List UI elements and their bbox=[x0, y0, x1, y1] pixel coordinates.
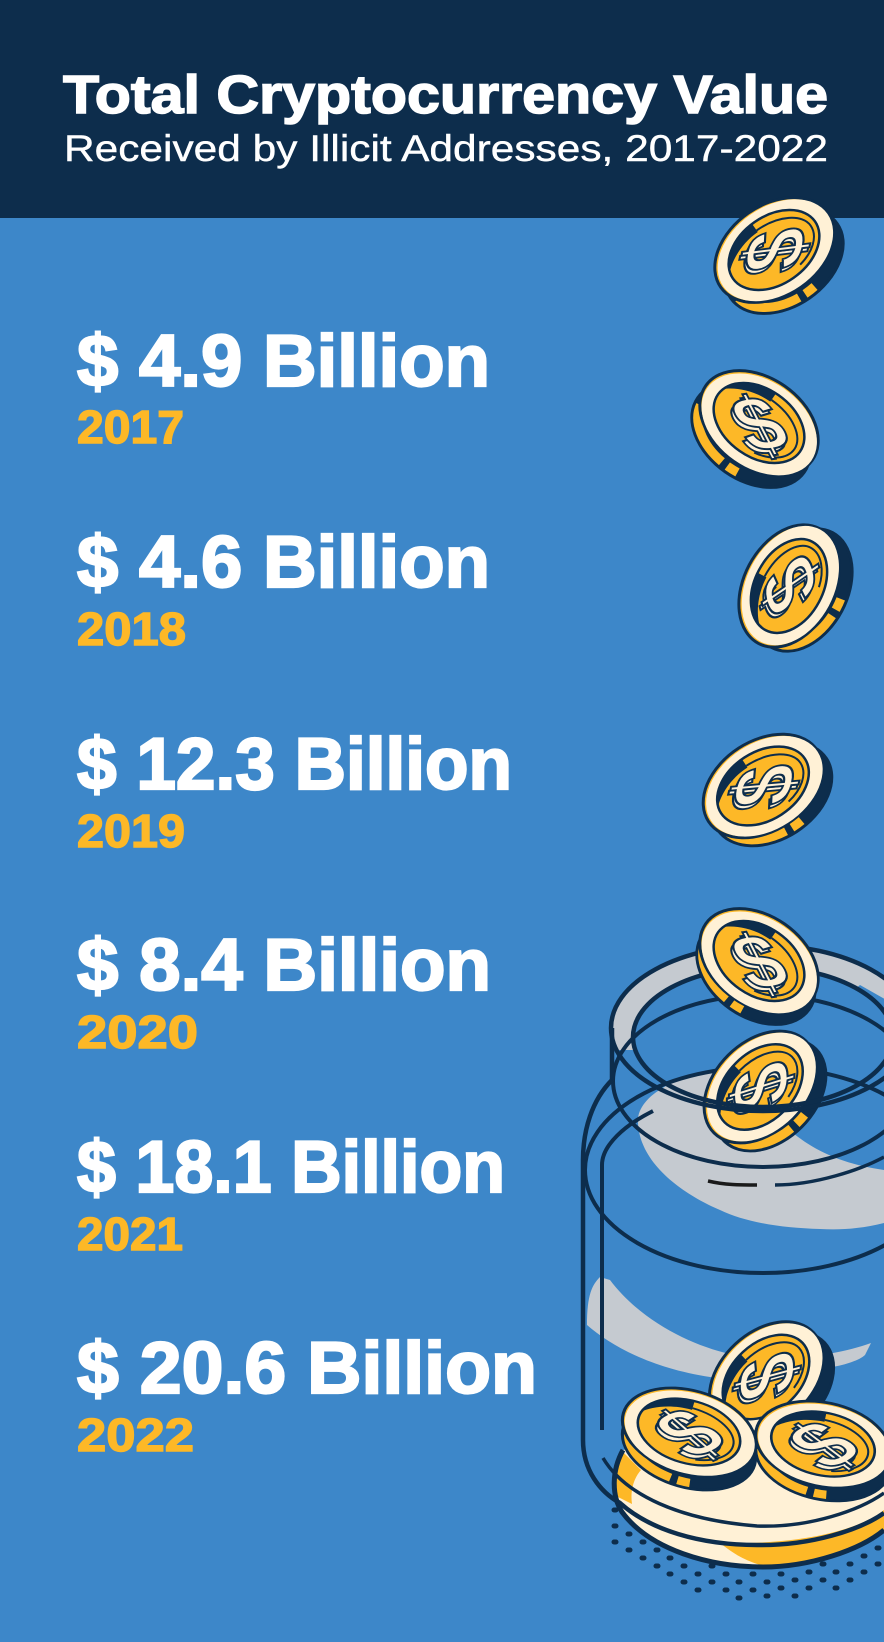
stat: 2020: $ 8.4 Billion bbox=[77, 925, 491, 1006]
icon: falling coin 3 bbox=[719, 507, 872, 669]
icon: falling coin 1: $ bbox=[722, 227, 825, 280]
jar: lid rings bbox=[611, 945, 884, 1111]
icon: falling coin 6 entering jar: $ bbox=[714, 1055, 805, 1126]
icon: falling coin 1: $ bbox=[724, 223, 827, 276]
jar: base filling bbox=[614, 1440, 884, 1567]
stat: 2021: $ 18.1 Billion bbox=[77, 1127, 505, 1208]
stat: 2020 bbox=[77, 925, 491, 1058]
icon: falling coin 6 entering jar bbox=[682, 1009, 848, 1173]
coin: pile left: $ bbox=[634, 1393, 746, 1473]
stat: 2022: $ 20.6 Billion bbox=[77, 1328, 537, 1409]
stat: 2017: 2017 bbox=[77, 401, 184, 453]
icon: falling coin 2: $ bbox=[715, 384, 800, 473]
icon: falling coin 3: $ bbox=[744, 542, 833, 636]
icon: falling coin 6 entering jar: $ bbox=[716, 1051, 807, 1122]
stat: 2020: 2020 bbox=[77, 1006, 198, 1058]
icon: falling coin 4 bbox=[684, 713, 851, 867]
icon: falling coin 5 above jar bbox=[677, 887, 838, 1046]
icon: falling coin 5 above jar: $ bbox=[715, 922, 800, 1011]
stat: 2022 bbox=[77, 1328, 537, 1461]
icon: falling coin 5 above jar: $ bbox=[717, 918, 802, 1007]
stat: 2021: 2021 bbox=[77, 1208, 183, 1260]
coin: pile right: $ bbox=[765, 1410, 879, 1488]
jar: glass highlights bbox=[587, 945, 884, 1385]
stat: 2017: $ 4.9 Billion bbox=[77, 321, 490, 402]
coin: pile left bbox=[612, 1373, 766, 1505]
coin: pile top bbox=[688, 1300, 855, 1464]
icon: halftone dot shadow bbox=[614, 1510, 879, 1598]
stat: 2018: 2018 bbox=[77, 603, 186, 655]
stat: 2017 bbox=[77, 321, 490, 453]
coin: pile top: $ bbox=[719, 1347, 812, 1414]
icon: falling coin 1 bbox=[695, 176, 863, 335]
icon: falling coin 2: $ bbox=[717, 380, 802, 469]
icon: coin pile in jar bbox=[612, 1300, 884, 1513]
coin: pile top: $ bbox=[721, 1343, 814, 1410]
icon: falling coin 3: $ bbox=[746, 538, 835, 632]
title: Total Cryptocurrency Value bbox=[63, 65, 828, 125]
icon: falling coin 2 bbox=[672, 349, 838, 509]
coin: pile left: $ bbox=[632, 1397, 744, 1477]
stat: 2018: $ 4.6 Billion bbox=[77, 522, 490, 603]
stat: 2021 bbox=[77, 1127, 505, 1260]
coin: pile right: $ bbox=[767, 1406, 881, 1484]
header banner bbox=[0, 0, 884, 218]
stat: 2018 bbox=[77, 522, 490, 655]
stat: 2022: 2022 bbox=[77, 1409, 194, 1461]
subtitle: Received by Illicit Addresses, 2017-2022 bbox=[64, 128, 828, 169]
icon: falling coin 4: $ bbox=[710, 765, 815, 815]
stat: 2019: 2019 bbox=[77, 805, 185, 857]
jar: outline behind coin bbox=[583, 995, 884, 1545]
icon: falling coin 4: $ bbox=[712, 761, 817, 811]
coin: pile right bbox=[748, 1389, 884, 1513]
stat: 2019 bbox=[77, 724, 512, 857]
stat: 2019: $ 12.3 Billion bbox=[77, 724, 512, 805]
